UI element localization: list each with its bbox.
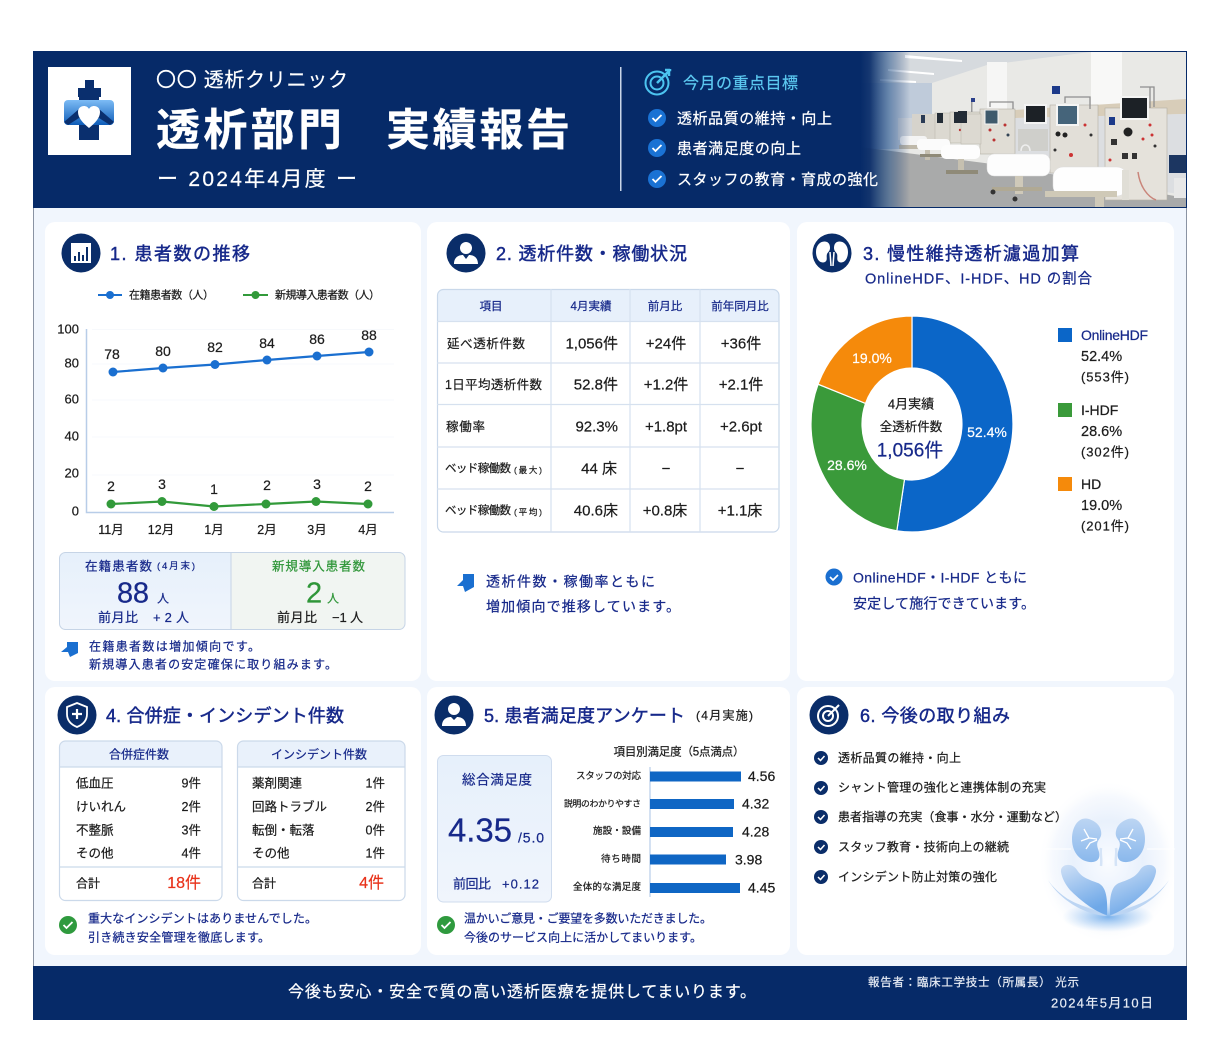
bar chart: 4.45 xyxy=(748,879,775,895)
donut chart xyxy=(811,316,1013,532)
series: new patients: 2 xyxy=(364,478,372,494)
bar chart: 待ち時間 xyxy=(601,853,641,865)
donut chart: 全透析件数 xyxy=(880,419,943,434)
table: incidents: その他 xyxy=(252,846,290,860)
KPI summary boxes xyxy=(59,552,405,630)
line chart: 60 xyxy=(65,392,79,406)
KPI summary boxes: −1 人 xyxy=(332,610,363,625)
KPI summary boxes: 人 xyxy=(157,591,169,605)
icon: bar chart xyxy=(62,234,100,272)
KPI summary boxes: 88 xyxy=(117,577,149,609)
table rows: ベッド稼働数 xyxy=(445,504,512,517)
table: complications: 2件 xyxy=(182,800,201,814)
table rows: ベッド稼働数 xyxy=(445,462,512,475)
table rows: +1.2件 xyxy=(644,376,688,394)
bar chart: 4.56 xyxy=(748,768,775,784)
table: incidents: 薬剤関連 xyxy=(252,776,303,790)
table: incidents: 回路トラブル xyxy=(252,799,327,814)
icon: target xyxy=(810,696,848,734)
series: new patients: 1 xyxy=(210,481,218,497)
report date: 2024年5月10日 xyxy=(1051,995,1153,1010)
KPI summary boxes: 2 xyxy=(306,577,322,609)
series: new patients xyxy=(106,476,372,511)
legend: 52.4% xyxy=(1081,349,1122,365)
divider xyxy=(620,67,622,191)
legend: (201件) xyxy=(1081,518,1129,534)
line chart: 11月 xyxy=(98,523,124,537)
KPI summary boxes: 人 xyxy=(327,591,339,605)
note with check xyxy=(59,910,317,944)
note with arrow: 透析件数・稼働率ともに xyxy=(486,573,655,589)
table: 前年同月比 xyxy=(711,299,769,313)
note with arrow xyxy=(457,573,680,614)
panel 3: donut of filtration types xyxy=(797,222,1174,681)
table rows: 延べ透析件数 xyxy=(447,336,525,351)
icon: person xyxy=(434,696,474,734)
table: complications: 18件 xyxy=(167,874,201,892)
series: enrolled patients xyxy=(104,327,377,376)
table: complications: 4件 xyxy=(182,846,201,860)
table: 前月比 xyxy=(648,299,683,313)
heading xyxy=(863,244,1092,287)
series: new patients: 2 xyxy=(263,477,271,493)
KPI summary boxes: + 2 人 xyxy=(153,610,189,625)
note with arrow: 新規導入患者の安定確保に取り組みます。 xyxy=(89,656,337,671)
panel 4: complications and incidents xyxy=(45,687,421,955)
series: new patients: 3 xyxy=(313,476,321,492)
main title: 透析部門 xyxy=(156,106,342,155)
table rows: 40.6床 xyxy=(574,502,618,520)
table: incidents xyxy=(238,741,405,900)
overall score box: +0.12 xyxy=(502,876,539,891)
goal list xyxy=(648,109,878,188)
table: 項目 xyxy=(480,300,502,313)
goals heading: 今月の重点目標 xyxy=(683,74,798,92)
note with check: 温かいご意見・ご要望を多数いただきました。 xyxy=(464,910,712,925)
reporter: 報告者：臨床工学技士（所属長） 光示 xyxy=(868,975,1079,989)
monthly goals xyxy=(646,69,878,188)
table: complications: 3件 xyxy=(182,823,201,837)
icon: person xyxy=(446,234,486,272)
illustration: kidneys in hands xyxy=(1038,780,1178,944)
table rows: 44 床 xyxy=(581,460,617,478)
line chart: 12月 xyxy=(148,523,174,537)
bar chart: 全体的な満足度 xyxy=(573,881,641,893)
table rows: +2.6pt xyxy=(720,418,763,436)
icon: shield xyxy=(58,696,96,734)
bar chart: 施設・設備 xyxy=(593,825,641,837)
logo xyxy=(48,67,131,155)
bar chart: 説明のわかりやすさ xyxy=(564,797,641,808)
initiatives list: インシデント防止対策の強化 xyxy=(838,869,997,884)
KPI summary boxes: (4月末) xyxy=(157,560,195,572)
line chart: 40 xyxy=(65,428,79,444)
machine C xyxy=(941,102,1015,174)
table rows: +0.8床 xyxy=(643,502,687,520)
line chart: 20 xyxy=(65,466,79,480)
line chart: 4月 xyxy=(358,523,378,537)
table: incidents: 合計 xyxy=(252,875,276,890)
series: enrolled patients: 80 xyxy=(155,343,171,359)
line chart: 2月 xyxy=(257,523,277,537)
table rows: − xyxy=(662,460,671,478)
note with check: 引き続き安全管理を徹底します。 xyxy=(88,929,270,944)
header banner xyxy=(33,51,1187,208)
series: enrolled patients: 84 xyxy=(259,335,275,351)
table rows: 1,056件 xyxy=(565,336,618,352)
line chart: 3月 xyxy=(307,523,327,537)
heading: 2. 透析件数・稼働状況 xyxy=(496,244,687,264)
table rows: (平均) xyxy=(514,507,542,517)
heading: 3. 慢性維持透析濾過加算 xyxy=(863,244,1079,264)
heading: OnlineHDF、I-HDF、HD の割合 xyxy=(865,270,1092,287)
main title: 実績報告 xyxy=(386,106,570,155)
KPI summary boxes: 在籍患者数 xyxy=(85,558,152,573)
note with check xyxy=(437,910,712,944)
note with arrow: 増加傾向で推移しています。 xyxy=(486,598,680,614)
line chart xyxy=(57,322,394,537)
table xyxy=(437,289,779,532)
table: complications xyxy=(60,741,222,900)
table rows: +1.1床 xyxy=(718,502,762,520)
initiatives list: 患者指導の充実（食事・水分・運動など） xyxy=(838,809,1067,824)
series: new patients: 3 xyxy=(158,476,166,492)
machine B xyxy=(987,86,1098,202)
initiatives list: 透析品質の維持・向上 xyxy=(838,750,961,765)
bar chart: 3.98 xyxy=(735,851,762,867)
table: complications: 合計 xyxy=(76,875,100,890)
initiatives list: スタッフ教育・技術向上の継続 xyxy=(838,839,1009,854)
heading: 1. 患者数の推移 xyxy=(110,244,250,264)
panel 1: patient trend xyxy=(45,222,421,681)
heading: (4月実施) xyxy=(696,708,753,722)
table: complications: 合併症件数 xyxy=(109,746,169,761)
series: enrolled patients: 82 xyxy=(207,339,223,355)
table: complications: けいれん xyxy=(76,800,126,814)
overall score box: /5.0 xyxy=(518,829,544,845)
bar chart: 4.32 xyxy=(742,795,769,811)
main title xyxy=(156,106,570,155)
legend xyxy=(98,287,380,301)
heading: 4. 合併症・インシデント件数 xyxy=(106,706,344,726)
goal list: 患者満足度の向上 xyxy=(677,140,801,158)
note with check: OnlineHDF・I-HDF ともに xyxy=(853,569,1027,585)
donut chart: 52.4% xyxy=(967,424,1007,440)
table rows: (最大) xyxy=(514,465,542,475)
note with arrow xyxy=(61,638,337,671)
donut chart: 28.6% xyxy=(827,457,867,473)
distant machines xyxy=(898,113,952,149)
table rows: +36件 xyxy=(721,336,761,352)
line chart: 0 xyxy=(72,504,79,518)
series: new patients: 2 xyxy=(107,478,115,494)
table: complications: 不整脈 xyxy=(76,822,114,837)
donut chart: 19.0% xyxy=(852,350,892,366)
legend: (302件) xyxy=(1081,444,1129,460)
overall score box: 4.35 xyxy=(448,811,512,848)
table rows: 92.3% xyxy=(575,418,618,436)
legend: (553件) xyxy=(1081,370,1129,384)
hospital photo xyxy=(860,52,1186,208)
legend: 新規導入患者数（人） xyxy=(275,287,380,301)
heading: 5. 患者満足度アンケート xyxy=(484,706,685,726)
donut chart: 4月実績 xyxy=(888,396,934,412)
series: enrolled patients: 88 xyxy=(361,327,377,343)
table: incidents: 1件 xyxy=(366,776,385,790)
legend: 28.6% xyxy=(1081,424,1122,440)
table rows: 52.8件 xyxy=(574,376,618,394)
note with check: 重大なインシデントはありませんでした。 xyxy=(88,910,317,925)
bar chart xyxy=(564,745,775,897)
table rows xyxy=(445,336,763,520)
table rows: +24件 xyxy=(646,336,686,352)
table: incidents: 2件 xyxy=(366,800,385,814)
table rows: − xyxy=(736,460,745,478)
initiatives list xyxy=(814,750,1067,884)
KPI summary boxes: 新規導入患者数 xyxy=(272,558,365,573)
series: enrolled patients: 86 xyxy=(309,331,325,347)
footer banner xyxy=(33,966,1187,1020)
icon: target xyxy=(646,69,670,94)
icon: kidneys xyxy=(812,234,852,272)
table: complications: 低血圧 xyxy=(76,776,114,790)
machine D xyxy=(917,98,980,160)
line chart: 100 xyxy=(57,322,79,336)
goal list: スタッフの教育・育成の強化 xyxy=(677,172,878,188)
table: incidents: 0件 xyxy=(366,823,385,837)
table: complications: その他 xyxy=(76,846,114,860)
panel 5: satisfaction survey xyxy=(427,687,790,955)
donut chart: 1,056件 xyxy=(877,440,943,462)
table: 4月実績 xyxy=(571,299,612,313)
panel 6: future initiatives xyxy=(797,687,1178,955)
legend: HD xyxy=(1081,476,1101,492)
line chart: 1月 xyxy=(204,523,224,537)
note with check: 安定して施行できています。 xyxy=(853,595,1035,611)
table: incidents: 4件 xyxy=(359,874,384,892)
legend: 19.0% xyxy=(1081,498,1122,514)
bar chart: スタッフの対応 xyxy=(576,770,641,782)
overall score box xyxy=(438,756,552,902)
overall score box: 総合満足度 xyxy=(462,772,532,787)
bar chart: 項目別満足度（5点満点） xyxy=(614,745,744,758)
bar chart: 4.28 xyxy=(742,823,769,839)
clinic name: 〇〇 透析クリニック xyxy=(156,68,348,91)
table: incidents: 1件 xyxy=(366,846,385,860)
table rows: +2.1件 xyxy=(719,376,763,394)
initiatives list: シャント管理の強化と連携体制の充実 xyxy=(838,779,1046,794)
overall score box: 前回比 xyxy=(453,876,491,891)
series: enrolled patients: 78 xyxy=(104,346,120,362)
table: incidents: 転倒・転落 xyxy=(252,823,315,837)
note with check xyxy=(826,568,1035,611)
heading: 6. 今後の取り組み xyxy=(860,706,1010,726)
legend: 在籍患者数（人） xyxy=(129,287,214,301)
note with arrow: 在籍患者数は増加傾向です。 xyxy=(89,638,260,653)
legend xyxy=(1058,327,1148,534)
report month: ー 2024年4月度 ー xyxy=(157,168,357,191)
table: complications: 9件 xyxy=(182,776,201,790)
legend: OnlineHDF xyxy=(1081,327,1148,343)
KPI summary boxes: 前月比 xyxy=(277,610,317,625)
table rows: 稼働率 xyxy=(446,420,485,434)
table rows: +1.8pt xyxy=(645,418,688,436)
closing message: 今後も安心・安全で質の高い透析医療を提供してまいります。 xyxy=(288,983,756,1001)
note with check: 今後のサービス向上に活かしてまいります。 xyxy=(464,929,702,944)
table rows: 1日平均透析件数 xyxy=(445,377,542,392)
KPI summary boxes: 前月比 xyxy=(98,610,138,625)
line chart: 80 xyxy=(65,356,79,370)
legend: I-HDF xyxy=(1081,402,1118,418)
goal list: 透析品質の維持・向上 xyxy=(677,110,832,128)
table: incidents: インシデント件数 xyxy=(271,746,367,761)
panel 2: dialysis counts table xyxy=(427,222,790,681)
machine A xyxy=(1045,87,1186,208)
